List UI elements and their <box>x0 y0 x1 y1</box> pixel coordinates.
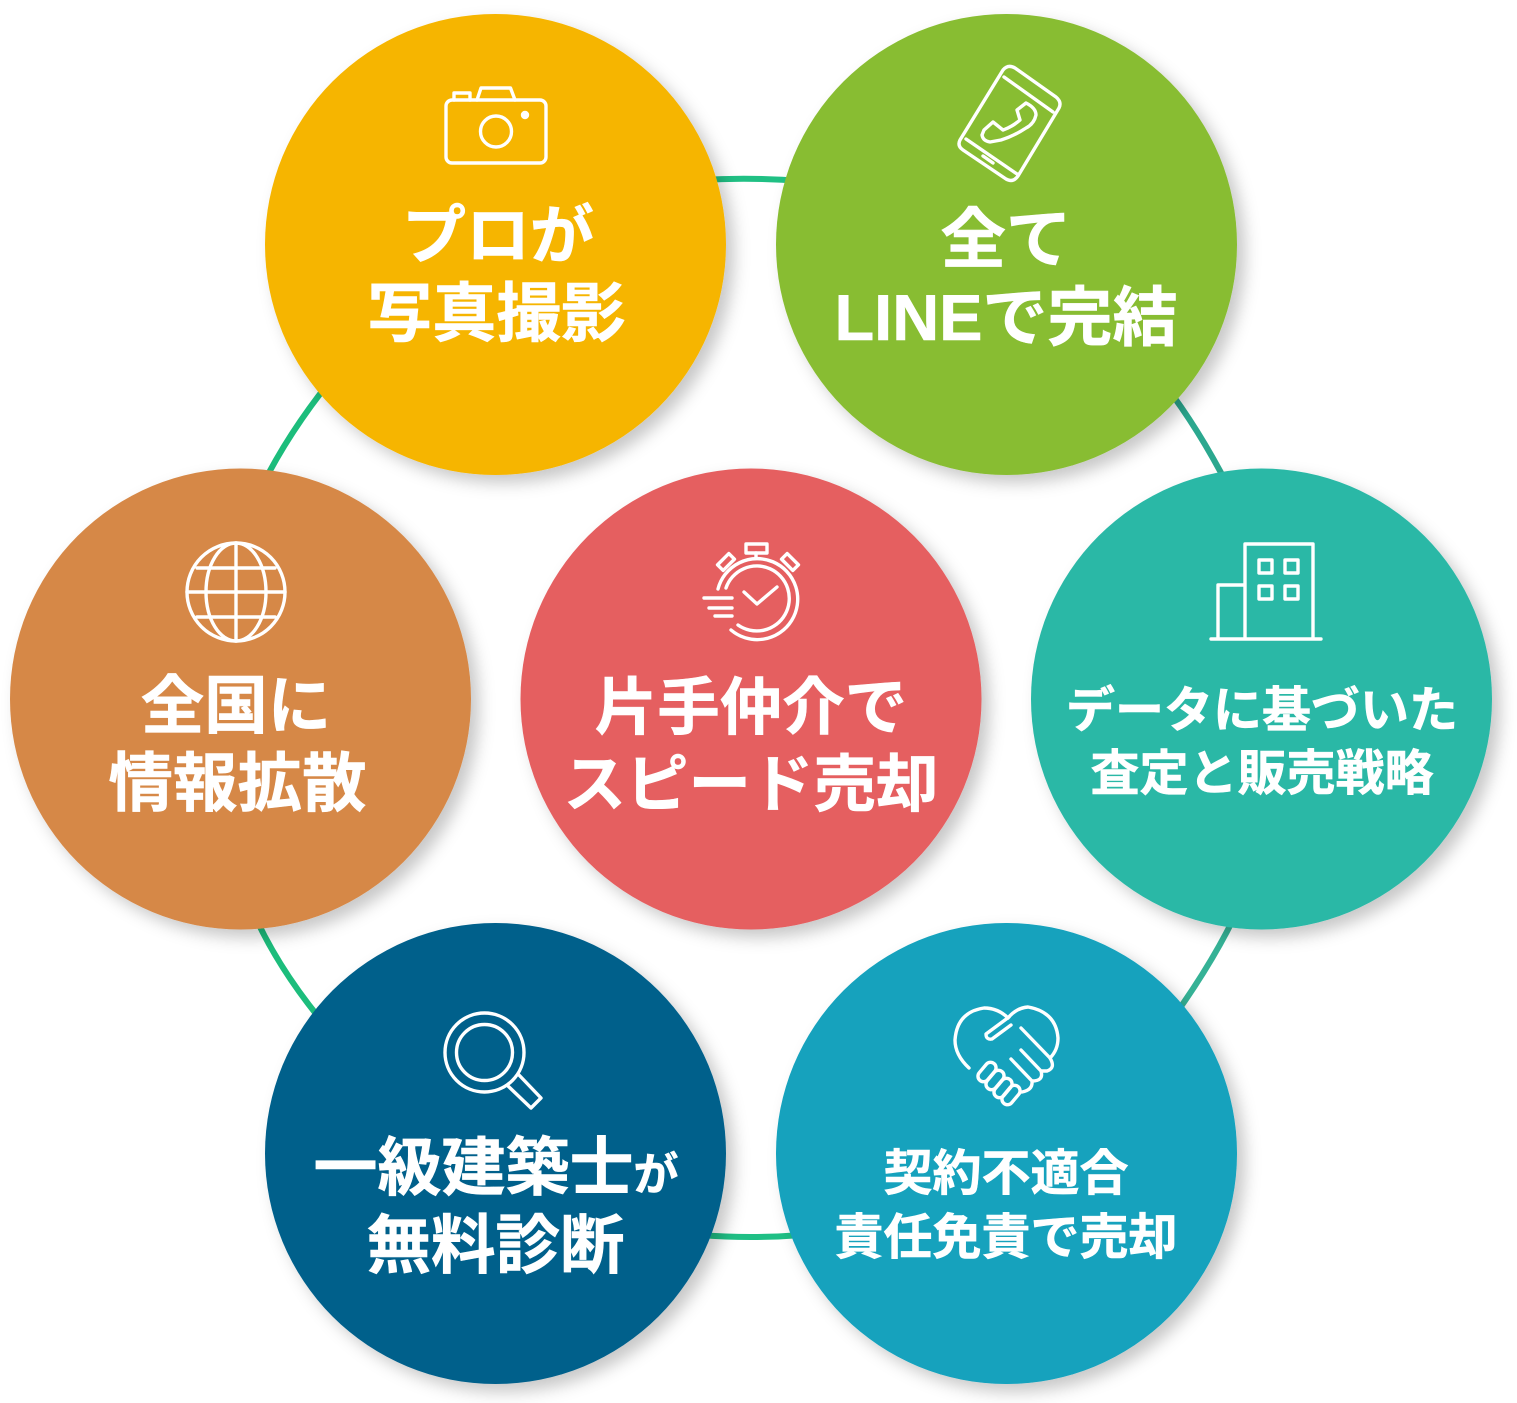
circle: all on LINE <box>776 14 1237 475</box>
heading: 一級建築士が無料診断 <box>313 1132 679 1282</box>
heading: 全国に情報拡散: 全国に <box>141 672 331 742</box>
icon: globe <box>187 543 285 641</box>
icon: magnifying glass <box>445 1013 541 1108</box>
heading: 全てLINEで完結: LINEで完結 <box>834 281 1178 354</box>
heading: データに基づいた査定と販売戦略: データに基づいた <box>1066 684 1458 738</box>
heading: 契約不適合責任免責で売却 <box>834 1147 1178 1265</box>
heading: プロが写真撮影: 写真撮影 <box>367 278 626 350</box>
icon: building <box>1211 544 1321 639</box>
heading: プロが写真撮影 <box>367 200 626 350</box>
heading: 契約不適合責任免責で売却: 責任免責で売却 <box>834 1211 1178 1265</box>
icon: camera <box>446 88 546 163</box>
heading: 片手仲介でスピード売却: スピード売却 <box>564 750 938 820</box>
heading: 全国に情報拡散: 情報拡散 <box>108 748 367 820</box>
circle: data-based appraisal <box>1031 468 1492 930</box>
icon: stopwatch <box>704 544 798 640</box>
icon: handshake heart <box>955 1007 1058 1107</box>
heading: 一級建築士が無料診断: 一級建築士が <box>313 1132 679 1204</box>
circle: professional photography <box>265 14 726 475</box>
heading: 片手仲介でスピード売却 <box>564 673 938 820</box>
circle: contract nonconformity exemption <box>776 923 1237 1384</box>
heading: データに基づいた査定と販売戦略 <box>1066 684 1458 801</box>
circle: first-class architect diagnosis <box>265 923 726 1384</box>
icon: smartphone <box>959 66 1060 180</box>
heading: 一級建築士が無料診断: 無料診断 <box>366 1210 625 1282</box>
heading: 片手仲介でスピード売却: 片手仲介で <box>595 673 907 743</box>
circle: nationwide information <box>10 468 471 930</box>
heading: 全てLINEで完結: 全て <box>940 203 1072 276</box>
connecting ring <box>250 179 1240 1237</box>
circle: speedy sale <box>520 468 982 930</box>
heading: 契約不適合責任免責で売却: 契約不適合 <box>883 1147 1129 1201</box>
heading: データに基づいた査定と販売戦略: 査定と販売戦略 <box>1090 747 1434 801</box>
heading: 全てLINEで完結 <box>834 203 1178 354</box>
heading: 全国に情報拡散 <box>108 672 367 820</box>
heading: プロが写真撮影: プロが <box>402 200 594 272</box>
